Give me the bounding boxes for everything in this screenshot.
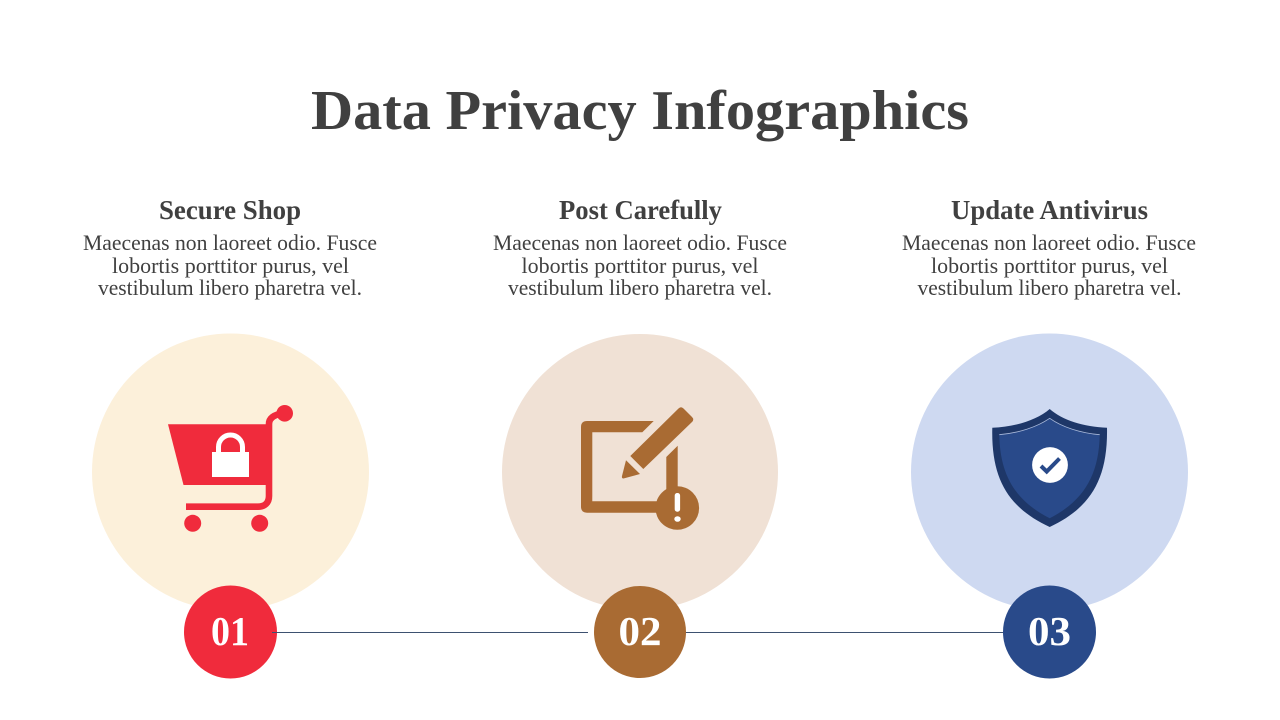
text block: secure shop xyxy=(83,230,377,300)
heading: secure shop: Secure Shop xyxy=(159,195,301,225)
panel: post carefully xyxy=(493,195,787,678)
text block: secure shop: Maecenas non laoreet odio. Fusce xyxy=(83,230,377,255)
text block: post carefully xyxy=(493,230,787,300)
text block: secure shop: vestibulum libero pharetra vel. xyxy=(98,275,362,300)
panel: secure shop xyxy=(83,195,377,678)
text block: update antivirus: vestibulum libero pharetra vel. xyxy=(918,275,1182,300)
text block: update antivirus: Maecenas non laoreet odio. Fusce xyxy=(902,230,1196,255)
circle: post carefully background xyxy=(502,334,778,610)
number badge: 01: 01 xyxy=(211,608,249,654)
text block: post carefully: Maecenas non laoreet odio. Fusce xyxy=(493,230,787,255)
number badge: 03 xyxy=(1003,586,1096,678)
number badge: 02 xyxy=(594,586,686,678)
icon: edit pencil with alert xyxy=(581,407,699,530)
heading: update antivirus: Update Antivirus xyxy=(951,195,1148,225)
heading: post carefully: Post Carefully xyxy=(559,195,722,225)
text block: update antivirus xyxy=(902,230,1196,300)
number badge: 03: 03 xyxy=(1028,608,1071,654)
number badge: 02: 02 xyxy=(618,608,662,654)
icon: shopping cart with lock xyxy=(168,405,293,532)
text block: post carefully: lobortis porttitor purus, vel xyxy=(522,253,758,278)
connector: 02 to 03 xyxy=(686,632,1003,634)
circle: secure shop background xyxy=(92,334,369,610)
title: Data Privacy Infographics xyxy=(311,80,969,142)
panel: update antivirus xyxy=(902,195,1196,678)
text block: update antivirus: lobortis porttitor purus, vel xyxy=(931,253,1168,278)
circle: update antivirus background xyxy=(911,334,1188,610)
icon: shield with check xyxy=(992,409,1107,527)
number badge: 01 xyxy=(184,586,277,678)
connector: 01 to 02 xyxy=(272,632,588,634)
text block: post carefully: vestibulum libero pharetra vel. xyxy=(508,275,772,300)
text block: secure shop: lobortis porttitor purus, vel xyxy=(112,253,349,278)
